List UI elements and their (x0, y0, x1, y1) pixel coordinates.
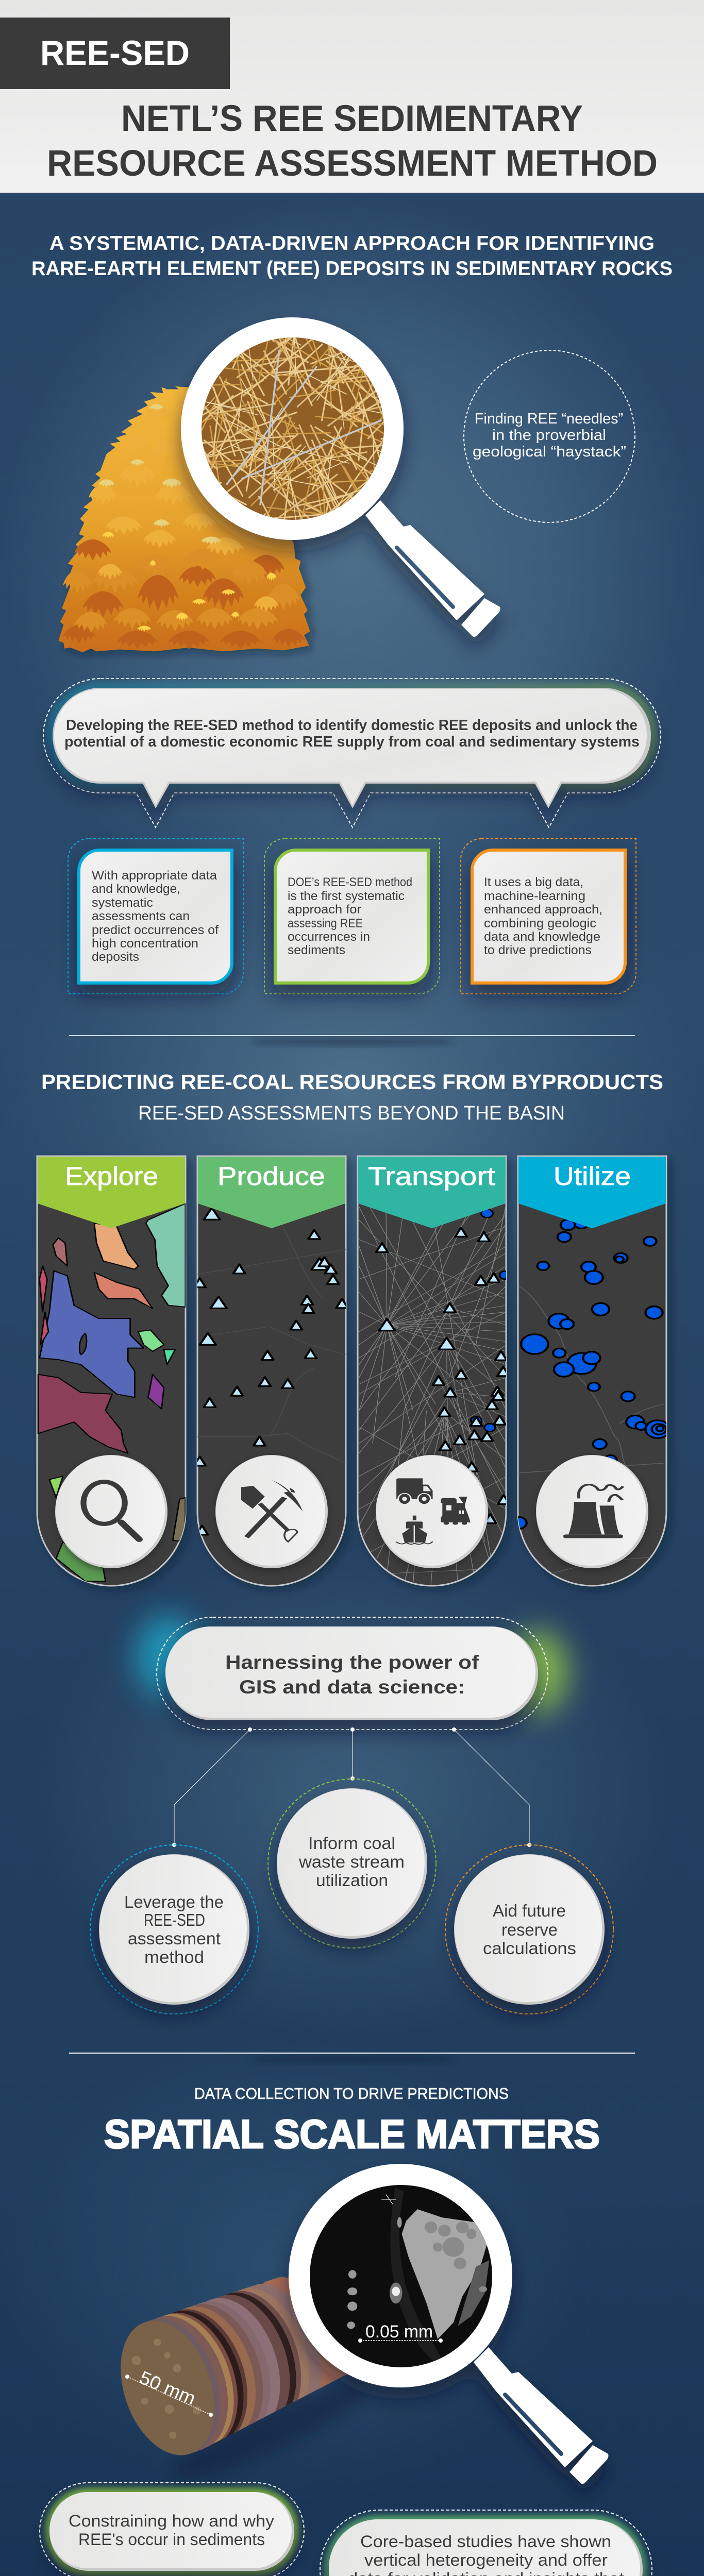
info box: blue: With appropriate data (92, 869, 217, 883)
info box: green: sediments (288, 943, 345, 957)
circle: inform: waste stream (298, 1852, 405, 1871)
map: basins (38, 1204, 186, 1581)
title (47, 98, 658, 184)
title: RESOURCE ASSESSMENT METHOD (47, 143, 658, 184)
GIS pill heading: GIS and data science: (239, 1676, 465, 1698)
speech bubble (43, 679, 661, 827)
lens: microscope image (304, 2179, 500, 2375)
intro heading (31, 232, 673, 280)
icon: shovel and pick (215, 1455, 328, 1571)
header: Utilize (518, 1157, 666, 1228)
circle: inform: Inform coal (308, 1834, 395, 1853)
icon: truck train ship (376, 1455, 488, 1571)
magnifier frame and handle (181, 317, 500, 637)
badge: REE-SED (0, 18, 230, 89)
circle: aid: calculations (483, 1939, 576, 1958)
info box: green: is the first systematic (288, 889, 405, 903)
illustration: core sample (104, 2255, 387, 2493)
header: Transport (358, 1157, 506, 1228)
dashed callout: finding needles: Finding REE “needles” (475, 411, 623, 427)
circle: inform (268, 1779, 436, 1948)
capsule: Transport (358, 1156, 510, 1586)
info box: green (264, 839, 440, 994)
map: producer triangles (194, 1208, 348, 1535)
section heading: spatial scale (104, 2084, 600, 2157)
capsule: Utilize (510, 1156, 670, 1586)
info box: blue: deposits (92, 950, 139, 964)
badge: REE-SED: REE-SED (40, 33, 190, 73)
circle: leverage: assessment (128, 1929, 221, 1948)
dashed callout: finding needles: geological “haystack” (473, 444, 626, 460)
needles (227, 350, 381, 504)
circle: aid: reserve (501, 1920, 558, 1939)
pill: constraining (40, 2483, 304, 2576)
info box: blue: systematic (92, 896, 153, 910)
info box: orange: data and knowledge (484, 930, 600, 944)
info box: green: DOE’s REE-SED method (288, 875, 412, 889)
info box: green: assessing REE (288, 917, 363, 930)
section heading: predicting REE-coal: PREDICTING REE-COAL RESOURCES FROM BYPRODUCTS (41, 1070, 663, 1094)
info box: orange: combining geologic (484, 917, 596, 930)
info box: blue (68, 839, 243, 994)
circle: leverage: Leverage the (124, 1892, 224, 1911)
info box: green: occurrences in (288, 930, 370, 944)
speech bubble: Developing the REE-SED method to identify domestic REE deposits and unlock the (66, 717, 638, 734)
circle: aid (445, 1845, 613, 2014)
info box: orange: machine-learning (484, 889, 585, 903)
connectors (172, 1727, 531, 1847)
info box: orange: enhanced approach, (484, 903, 602, 917)
lens: straw and needles (202, 337, 384, 520)
speech bubble: potential of a domestic economic REE supply from coal and sedimentary systems (64, 734, 640, 750)
dashed callout: finding needles (464, 350, 635, 522)
header: Explore: Explore (65, 1162, 158, 1191)
intro heading: RARE-EARTH ELEMENT (REE) DEPOSITS IN SEDIMENTARY ROCKS (31, 258, 673, 280)
pill: core-based: Core-based studies have shown (360, 2532, 611, 2551)
info box: blue: predict occurrences of (92, 923, 219, 937)
circle: inform: utilization (316, 1871, 388, 1890)
info box: blue: and knowledge, (92, 882, 180, 896)
circle: leverage (90, 1845, 258, 2014)
circle: leverage: method (144, 1947, 204, 1967)
intro heading: A SYSTEMATIC, DATA-DRIVEN APPROACH FOR IDENTIFYING (49, 232, 655, 255)
magnifier with needles in straw (168, 317, 506, 654)
circle: aid: Aid future (493, 1901, 566, 1920)
info box: blue: high concentration (92, 937, 198, 951)
top header band (0, 0, 704, 193)
pill: core-based (320, 2510, 652, 2576)
title: NETL’S REE SEDIMENTARY (121, 98, 583, 139)
section heading: spatial scale: DATA COLLECTION TO DRIVE PREDICTIONS (194, 2084, 509, 2103)
pill: core-based: vertical heterogeneity and offer (364, 2551, 608, 2569)
map: utilization plants (510, 1218, 670, 1578)
section heading: predicting REE-coal: REE-SED ASSESSMENTS BEYOND THE BASIN (138, 1103, 565, 1124)
capsule: Produce (194, 1156, 348, 1586)
header: Produce (198, 1157, 345, 1228)
pill: constraining: Constraining how and why (69, 2512, 274, 2530)
section heading: spatial scale: SPATIAL SCALE MATTERS (104, 2111, 600, 2157)
info box: blue: assessments can (92, 909, 190, 923)
50 mm label: 50 mm (137, 2367, 199, 2409)
dashed callout: finding needles: in the proverbial (492, 427, 606, 444)
header: Explore (38, 1157, 185, 1228)
GIS pill heading: Harnessing the power of (225, 1652, 479, 1673)
info box: orange: It uses a big data, (484, 875, 583, 889)
info box: orange (461, 839, 636, 994)
section heading: predicting REE-coal (41, 1070, 663, 1124)
circle: leverage: REE-SED (144, 1910, 205, 1929)
capsule: Explore (37, 1156, 186, 1586)
header: Transport: Transport (368, 1162, 495, 1191)
header: Produce: Produce (217, 1162, 325, 1191)
GIS pill heading (137, 1615, 567, 1730)
info box: green: approach for (288, 903, 361, 917)
50 mm label (125, 2367, 213, 2417)
magnifier with microscope view (289, 2164, 609, 2484)
icon: magnifying glass (55, 1455, 167, 1571)
pill: constraining: REE's occur in sediments (78, 2530, 265, 2549)
icon: power plant (536, 1455, 648, 1571)
magnifier frame and handle (289, 2164, 609, 2484)
map: transport network (359, 1204, 510, 1585)
info box: orange: to drive predictions (484, 943, 592, 957)
illustration: haystack (58, 386, 310, 652)
header: Utilize: Utilize (554, 1162, 631, 1191)
0.05 mm label: 0.05 mm (365, 2322, 433, 2342)
